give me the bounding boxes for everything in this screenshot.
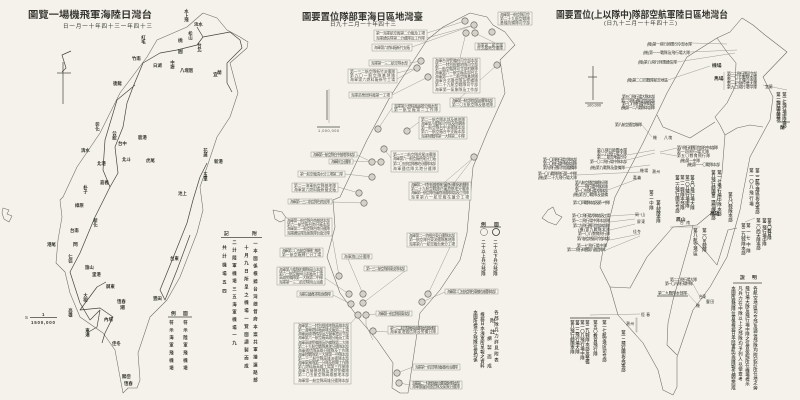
unit boxes: 台北基地分遣隊	[477, 46, 503, 50]
unit boxes: 第一航空艦隊司令部附屬隊	[435, 66, 478, 71]
islands: Penghu	[273, 210, 287, 222]
unit boxes: 海軍陸戰隊第一大隊第二中隊	[421, 134, 465, 138]
unit boxes: 海軍苗栗燃料廠第一工場	[351, 92, 390, 98]
map outline: Taiwan coast	[327, 13, 515, 393]
text rows north: 第八航空通信聯隊	[615, 122, 642, 127]
place labels: 園	[178, 49, 183, 55]
text rows west central	[538, 145, 720, 252]
text rows west central: 第二二飛行師團第八通信隊本	[567, 247, 606, 252]
islands: Penghu	[542, 207, 562, 225]
unit boxes: 海軍第一氣象隊及工作部	[435, 87, 478, 92]
unit boxes: 海軍第一三二航空隊岡山派遣	[279, 280, 323, 284]
unit boxes: 海軍第一三二航空隊台南支隊	[290, 199, 330, 204]
text rows west central: 第二九飛行團司令部本部隊	[573, 223, 610, 228]
vertical column blocks: 第一〇八飛行場	[749, 167, 754, 207]
unit boxes: 第一航空隊台中派遣隊本部	[421, 125, 465, 130]
text rows west central: 第八飛行師團司令部台中本部隊	[677, 145, 718, 150]
note block: airfield summary: 二計陸軍機場三五海軍機場一九	[232, 240, 238, 346]
note block: air force unit map	[731, 274, 762, 391]
date line: airfield map: 日一月一十年四十三一年四十三	[63, 22, 152, 30]
unit boxes: 海軍左營通信隊及氣象隊	[299, 292, 331, 296]
place labels: 新化	[93, 217, 98, 228]
vertical column blocks: 第九戰隊本隊	[656, 199, 662, 224]
lower left unit block: 第一七航空地區司令部	[602, 319, 608, 363]
vertical column blocks: 第八飛行師團第二通信隊本部	[711, 169, 716, 221]
vertical column blocks: 第一二戰隊本部隊	[680, 174, 686, 211]
text rows west central: 第一〇二飛行場大隊本部及工場	[572, 213, 610, 218]
unit boxes: 海軍氣象隊第一分隊及附屬工作隊	[298, 360, 349, 365]
vertical column blocks: 第二六飛行團司令部	[675, 174, 680, 214]
unit boxes	[277, 12, 532, 389]
unit boxes: 海軍通信隊高雄分遣隊及工作隊	[298, 348, 349, 353]
scale bar: S	[25, 315, 28, 320]
place labels: 後龍	[113, 80, 122, 87]
place labels: 虎尾	[146, 157, 155, 164]
vertical column blocks	[649, 167, 772, 256]
text rows west central: 第一〇五飛行場大隊本部	[575, 188, 608, 193]
note block: air force unit map: 凡兵力在中隊以上之部隊均予列入以便查考	[738, 286, 744, 382]
unit boxes: 海軍第一航空隊屏東本部	[378, 311, 410, 316]
text rows north: 第一二八獨立中隊	[727, 78, 757, 83]
unit boxes: 海軍第二一航空隊台南分遣隊	[287, 226, 330, 231]
heading: navy unit map title: 圖要置位隊部軍海日區地灣臺	[302, 11, 423, 23]
text rows west central: 第八航空地區司令部本部	[577, 236, 610, 241]
unit boxes: 第二十九航空戰隊司令部	[435, 82, 478, 87]
place labels: 潮	[120, 304, 125, 311]
vertical column blocks: 鳳山	[676, 216, 686, 223]
text rows west central: 機場	[640, 168, 648, 173]
text rows south east: 第二九戰隊本部隊	[658, 290, 687, 296]
legend: airfield map: 符示海軍飛機場	[169, 319, 174, 371]
unit boxes: 第一海軍燃料廠高雄支廠第二工場	[298, 327, 349, 332]
unit boxes: 第六一航空廠岡山本廠及工場	[279, 271, 323, 276]
vertical column blocks: 第五〇飛行場大隊	[690, 174, 696, 211]
note block: airfield summary: 記	[224, 230, 229, 237]
place labels: 港尾	[47, 241, 56, 248]
text rows west central: 第一〇八戰隊飛行第一中隊	[538, 171, 577, 176]
place labels: 清水	[81, 147, 90, 154]
unit boxes: 海軍第二一特別根據地隊花蓮港分遣隊及附屬隊	[411, 182, 469, 187]
unit boxes: 海軍第六一航空廠本部台北	[435, 70, 478, 75]
place labels: 鹿港	[138, 134, 147, 141]
unit boxes: 第一三二航空隊新竹派遣隊	[350, 69, 395, 74]
text rows west central: 第五〇教育飛行隊	[677, 153, 710, 158]
unit boxes: 海軍高雄港務部及左營軍港司令部	[298, 331, 349, 336]
lower left unit block: 潮州	[626, 321, 634, 326]
legend: navy unit map: 例	[481, 221, 486, 228]
unit boxes: 海軍第一三二航空隊本部	[371, 60, 408, 66]
vertical column blocks: 第一七飛行場中隊本部	[717, 169, 722, 217]
place labels: 北斗	[122, 156, 131, 163]
note block: airfield summary: 一本圖係根據台灣總督府本案共軍接運路部	[253, 241, 258, 383]
place labels: 大樹	[83, 292, 88, 303]
text rows north: (機)第一二八戰隊本部隊	[621, 105, 655, 110]
place labels: 內埔	[104, 316, 113, 323]
unit boxes: 海軍第二〇五航空隊台東基地派遣隊本部	[447, 289, 496, 294]
unit boxes: 基隆防備隊司令部	[500, 20, 530, 25]
place labels: 里港	[92, 271, 101, 277]
rivers and boundaries	[610, 38, 763, 355]
unit boxes: 海軍第六一航空廠高雄分廠及工場	[298, 335, 349, 340]
vertical column blocks: 第二九戰隊本部	[741, 222, 746, 256]
text rows north	[615, 42, 790, 140]
place labels: 台北	[197, 42, 202, 53]
leader lines	[570, 43, 787, 318]
lower left unit block: 恆春	[641, 312, 650, 317]
location circles	[336, 18, 500, 386]
vertical column blocks: 第一七中隊	[746, 222, 752, 254]
text rows west central: 第二九飛行場大隊	[597, 151, 627, 156]
unit boxes: 海軍左營基地隊及港灣警備隊	[298, 368, 349, 373]
lower left unit block	[570, 312, 650, 373]
text rows west central: 第二〇飛行場中隊本部隊	[543, 161, 577, 166]
text rows south east: 第一〇八飛行場中隊	[665, 281, 693, 286]
unit boxes: 第一航空廠第二工作隊	[394, 107, 438, 112]
place labels: 宜	[213, 71, 218, 78]
north arrow and scale	[317, 89, 340, 133]
lower left unit block: 第一二飛行團司令部本部	[621, 329, 626, 373]
place labels: 松山	[188, 30, 194, 41]
text rows west central: 第一〇二飛行場中隊本部	[590, 159, 627, 164]
text rows south east	[657, 277, 714, 308]
note block: air force unit map: 各航空地區司令部及通信部隊均附記於所在地之旁	[753, 285, 758, 391]
unit boxes: 第二十九航空戰隊花蓮港基地分遣隊	[411, 186, 469, 191]
note block: navy unit map: 根據日本海軍所呈報之資料	[480, 311, 486, 369]
heading: airfield map title: 圖覽一場機飛軍海陸日灣台	[28, 9, 152, 21]
place labels: 旗山	[85, 264, 94, 271]
unit boxes: 第二一特別根據地隊司令部	[435, 62, 478, 67]
text rows west central: (機)第一一〇戰隊本部	[687, 162, 720, 167]
unit boxes: 海軍台北通信隊及警備隊	[435, 78, 478, 83]
legend: airfield map: 例	[171, 310, 176, 317]
place labels: 玉里	[203, 172, 208, 181]
legend: navy unit map: 圖	[494, 222, 499, 228]
unit boxes: 海軍第一航空隊台南基地本部	[287, 218, 330, 223]
note block: air force unit map: 飛行場大隊及飛行場中隊之位置依照所在機場標示	[745, 285, 750, 387]
unit boxes: 第二〇五航空隊基地分遣隊本部	[393, 161, 436, 166]
unit boxes: 海軍通信隊及氣象隊台南分隊	[287, 230, 330, 236]
place labels: 東港	[85, 327, 90, 337]
north arrow and scale: 1,000,000	[318, 129, 339, 133]
vertical column blocks: 高雄	[710, 210, 720, 217]
note block: navy unit map	[473, 309, 500, 369]
unit boxes: 海軍第二〇五航空隊歸仁基地	[282, 248, 321, 253]
unit boxes: 海軍第二一特根台東分遣隊本部	[409, 233, 455, 238]
unit boxes: 海軍陸戰隊第三大隊第一中隊本部	[298, 352, 349, 357]
place labels: 恆春	[124, 380, 133, 387]
unit boxes: 海軍第二一特根恆春分遣隊基地隊本部	[412, 380, 460, 386]
unit boxes: 第二十九航空戰隊基地分遣隊本部	[298, 344, 349, 349]
north arrow and scale	[585, 66, 603, 108]
text rows west central: (機)第九戰隊及整備隊	[590, 165, 625, 170]
lower left unit block: 第一〇八飛行場中隊	[580, 319, 586, 361]
place labels: 新港	[214, 158, 223, 165]
unit boxes: 海軍台灣警備府司令部本部	[435, 58, 478, 63]
scale bar: 1	[42, 312, 45, 317]
scale bar	[25, 312, 57, 325]
text rows north: 第一〇五戰隊本隊	[727, 74, 757, 80]
vertical column blocks: 第一〇五戰隊	[702, 227, 708, 253]
unit boxes: 海軍第六一航空廠花蓮分工場	[411, 194, 469, 200]
vertical column blocks: 第五〇教育隊	[767, 217, 772, 241]
place labels: 日湖	[153, 62, 162, 69]
unit boxes: 海軍第一三二航空隊基地隊	[435, 74, 478, 79]
map outline: Taiwan coast	[600, 18, 787, 395]
place labels: 蘭	[217, 69, 222, 76]
vertical column blocks: 第一〇四大隊本部	[756, 217, 762, 251]
lower left unit block: 第二九戰隊本部及整備	[585, 319, 590, 365]
text rows north: 宜蘭	[765, 84, 773, 89]
place labels: 屏東	[106, 283, 115, 290]
place labels: 樟原	[75, 202, 84, 209]
text rows south east: 台東	[699, 294, 706, 299]
unit boxes: 海軍東港通信隊及警備分隊	[390, 329, 436, 334]
text rows north: (機)第二〇四戰隊航空地區	[627, 78, 668, 82]
unit boxes: 海軍第八艦隊司令部及附屬隊	[421, 121, 465, 126]
text rows west central: 佳冬	[633, 229, 641, 234]
text rows west central: 第一〇八教育飛行隊	[578, 231, 610, 236]
place labels: 恆春	[117, 298, 126, 305]
lower left unit block: 第八飛行師團本隊	[570, 319, 576, 355]
text rows south east: 機	[696, 303, 700, 308]
note block: navy unit map: 附	[489, 317, 495, 324]
legend: navy unit map: 二十以上兵力部隊	[481, 240, 486, 277]
unit boxes: 海軍第一航空隊台中基地隊本部	[313, 152, 355, 157]
text rows north: 蘭	[780, 124, 785, 131]
unit boxes: 海軍第一航空隊高雄分遣隊本部	[298, 378, 349, 383]
vertical column blocks: 第二飛行場中隊	[762, 217, 768, 247]
unit boxes: 海軍第一航空隊司令	[500, 12, 530, 17]
unit boxes: 第一三二航空隊屏東支隊本部	[366, 266, 405, 271]
panel: navy unit map	[273, 11, 532, 393]
place labels: 淡水	[194, 21, 203, 27]
place labels: 嘉義	[100, 179, 109, 186]
text rows north: 第九〇飛行場中隊	[727, 84, 757, 90]
place labels: 竹南	[132, 55, 141, 62]
note block: navy unit map: 各部隊兵力詳見附表	[494, 309, 500, 363]
note block: air force unit map: 明	[752, 275, 757, 281]
vertical column blocks: 第九〇戰隊本部	[728, 191, 734, 223]
place labels: 豐田	[153, 295, 162, 302]
place labels: 八塊厝	[180, 67, 194, 74]
lower left unit block: 第二二飛行場大隊	[575, 319, 580, 355]
note block: navy unit map: 註	[489, 328, 495, 335]
railway network	[70, 27, 242, 343]
note block: airfield summary	[221, 230, 262, 383]
text rows west central: (機)第九戰隊本隊	[578, 227, 610, 232]
unit boxes: 海軍通信隊第二分遣隊及工作隊	[376, 36, 425, 40]
unit boxes: 第一海軍航空廠第二分廠及工場	[376, 30, 425, 36]
unit boxes: 第一航空隊台東派遣隊基地隊	[409, 237, 455, 242]
unit boxes: 海軍通信隊北港分遣隊	[393, 166, 436, 171]
text rows west central: 第二〇四戰隊本部及第一中隊	[573, 200, 610, 205]
panel: airfield map	[2, 8, 262, 393]
unit boxes: 第一三二航空隊虎尾派遣隊	[393, 152, 436, 157]
unit boxes: 第一航空廠歸仁分工場	[282, 252, 321, 257]
text rows north: (機)第一飛行師團司令部本隊	[647, 42, 692, 46]
place labels: 朴子	[83, 184, 88, 195]
text rows south east: 豐田	[706, 299, 714, 304]
place labels: 池上	[178, 190, 187, 196]
text rows north: 第二六飛行團司令部本部	[621, 98, 655, 103]
unit boxes: 第一航空廠清水分工場第二隊	[300, 172, 343, 176]
north arrow	[57, 51, 71, 104]
note block: airfield summary: 共計機場五四	[222, 244, 228, 294]
unit boxes: 第六燃料廠高雄工場第三作業隊	[298, 364, 349, 369]
unit boxes: 第一三二航空隊東港派遣隊本部基地隊	[390, 326, 436, 330]
unit boxes: 第九〇一航空隊基地隊	[350, 73, 395, 78]
text rows west central: 第二二航空地區司令	[597, 154, 627, 160]
text rows north: 機	[653, 135, 657, 140]
unit boxes: 第六一航空廠台南分廠本部	[287, 222, 330, 227]
legend: navy unit map: 二十以下兵力部隊	[493, 240, 498, 277]
text rows north: 第一〇八飛行場中隊本部	[622, 101, 655, 106]
unit boxes: 海軍高雄警備隊及防備隊第二大隊	[298, 340, 349, 345]
note block: navy unit map: 本圖所標示之部隊位置均係	[473, 309, 478, 363]
place labels: 紅毛	[141, 34, 146, 44]
place labels: 公館	[112, 130, 118, 141]
text rows west central: 屏東	[637, 219, 645, 224]
text rows north: (機)第一一戰隊及飛行場大隊	[643, 50, 690, 55]
note block: airfield summary: 十月九日所呈之機場一覽圖調製而成	[244, 244, 250, 369]
unit boxes: 海軍第二航空隊	[477, 42, 503, 48]
text rows north: 八塊	[664, 135, 672, 140]
note block: airfield summary: 附	[252, 230, 257, 237]
islands: Penghu	[2, 208, 12, 222]
unit boxes: 海軍第六燃料廠新竹工場	[350, 77, 395, 82]
place labels: 花蓮	[203, 147, 208, 158]
unit boxes: 海軍彰化分遣隊	[331, 159, 351, 164]
text rows north: 第一七飛行場大隊	[727, 81, 757, 86]
legend: airfield map: 圖	[183, 311, 188, 317]
unit boxes: 海軍第一航空隊花蓮港派遣隊本部及工作隊	[411, 190, 469, 195]
unit boxes: 海軍第六燃料廠新營支廠	[294, 187, 336, 192]
lower left unit block: 第五〇教育飛行隊	[593, 319, 598, 357]
text rows west central: (機)第五〇戰隊及整備	[573, 192, 608, 197]
text rows west central: 第一四飛行場大隊	[677, 149, 709, 154]
text rows north: 第二二飛行團司令部	[727, 71, 757, 76]
legend: airfield map	[168, 310, 192, 371]
heading: air force unit map title: 圖要置位(上以隊中)隊部空航軍陸日區地灣台	[556, 9, 728, 21]
legend: navy unit map	[480, 221, 501, 277]
leader lines	[325, 21, 497, 385]
unit boxes: 海軍第六燃料廠新竹支廠	[374, 45, 410, 50]
unit boxes: 第六一航空廠台中支廠本部	[421, 129, 465, 134]
text rows west central: (機)第一中隊	[680, 158, 700, 163]
map outline: Taiwan coast	[56, 13, 248, 393]
place labels: 桃	[178, 37, 183, 44]
vertical column blocks: 第二二航空地區司令部本部	[755, 167, 760, 215]
vertical column blocks: 第一〇八飛行場中隊	[685, 174, 690, 209]
place labels: 高雄	[68, 307, 74, 318]
place labels: 岡	[73, 242, 78, 248]
text rows north: 機場	[712, 62, 722, 69]
place labels: 台東	[170, 255, 179, 262]
unit boxes: 第二〇五航空隊高雄基地本部	[298, 372, 349, 377]
text rows west central: 第一七飛行場中隊	[577, 243, 607, 248]
unit boxes: 第二一航空隊本部及基地隊	[421, 117, 465, 122]
text rows north: (機)第八飛行師團通信隊	[638, 60, 677, 64]
place labels: 水上飛	[184, 8, 190, 24]
text rows west central: 潮州	[652, 169, 660, 174]
text rows west central: 台南	[680, 220, 690, 225]
text rows west central: 嘉義	[633, 175, 641, 180]
place labels: 彰化	[95, 121, 100, 132]
text rows north: 第一七飛行場中隊本部	[782, 91, 788, 129]
note block: air force unit map: 說	[740, 274, 745, 281]
unit boxes: 海軍第六一航空廠台東分工場	[409, 242, 455, 246]
place labels: 台中	[118, 140, 127, 147]
text rows west central: 第八飛行師團本隊	[597, 148, 627, 152]
unit boxes: 海軍第六燃料廠高雄分廠本部	[394, 104, 438, 108]
vertical column blocks: 第八航空地區	[693, 227, 698, 256]
note block: air force unit map: 本圖所載部隊位置係根據日本陸軍航空部隊報告調製而成	[731, 285, 736, 391]
text rows west central: 第一二飛行場中隊本部隊	[572, 218, 610, 223]
unit boxes: 第二一海軍航空隊基地隊	[294, 183, 336, 188]
unit boxes: 海軍第二一特別根據地隊高雄本部	[298, 323, 349, 328]
text rows south east: 第二二飛行場大隊	[670, 277, 697, 282]
place labels: 仁德	[68, 253, 74, 264]
text rows west central: 第九飛行團司令部整備隊	[543, 165, 577, 170]
place labels: 北港	[97, 160, 106, 167]
unit boxes: 第二〇五航空隊及基地隊	[452, 102, 493, 107]
place labels: 台南	[70, 227, 79, 234]
unit boxes: 海軍鵝鑾鼻通信隊及氣象分遣隊	[412, 384, 460, 389]
text rows north: 馬場	[714, 75, 724, 82]
place labels: 佳冬	[112, 340, 121, 347]
place labels: 鵝巒	[122, 373, 131, 380]
text rows west central: 第一〇四飛行場大隊本部	[543, 157, 577, 162]
date line: navy unit map: 日九十二月一十年四十三	[330, 20, 396, 28]
date line: air force unit map: (日九十二月一十年四十三)	[604, 19, 677, 27]
place labels	[47, 8, 223, 387]
text rows north: 第二二飛行團宜蘭基地	[776, 91, 782, 122]
panel: air force unit map	[538, 9, 790, 395]
unit boxes: 海軍第八艦隊附屬隊岡山本部	[279, 267, 323, 272]
unit boxes: 海軍第一航空隊宜蘭派遣隊本部	[452, 98, 493, 103]
text rows west central: 第一一飛行場中隊本隊	[575, 184, 608, 189]
note block: navy unit map: 調製而成	[487, 335, 492, 369]
unit boxes: 海軍旗山分遣隊	[344, 254, 370, 259]
text rows west central: (機)第二十九飛行場大隊	[538, 175, 577, 180]
unit boxes: 海軍第六一航空廠虎尾分工廠	[393, 156, 436, 161]
unit boxes: 高雄警備隊第一大隊第二中隊	[279, 275, 323, 280]
place labels: 中壢	[170, 59, 176, 70]
unit boxes: 海軍第一航空隊恆春基地派遣隊	[415, 364, 458, 370]
unit boxes: 第一三二航空隊高雄派遣隊本部	[298, 356, 349, 361]
unit boxes: 第二十九航空戰隊	[500, 16, 530, 21]
scale bar: 1500,000	[31, 320, 56, 325]
legend: airfield map: 符示陸軍飛機場	[183, 319, 188, 371]
text rows north: 第五〇飛行場大隊本部	[622, 94, 655, 99]
vertical column blocks: 第二中隊	[649, 189, 654, 211]
text rows west central: 岡山	[635, 212, 645, 217]
north arrow and scale: 100,000	[587, 104, 601, 108]
text rows west central: 第八航空通信聯隊分隊	[575, 180, 608, 185]
